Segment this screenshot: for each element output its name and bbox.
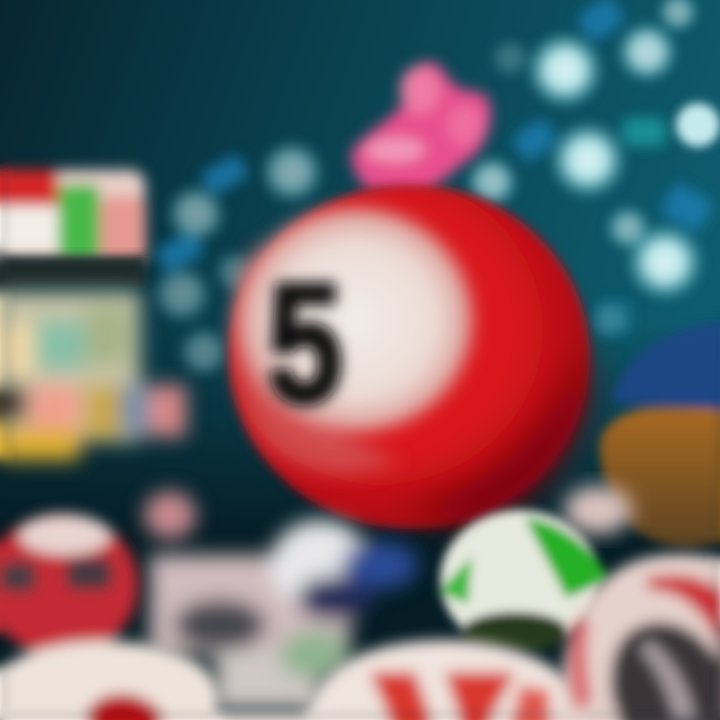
glowing network dots (150, 0, 720, 380)
bottom-centre ball (305, 640, 590, 720)
left shelf: striped ball row (0, 170, 146, 265)
main red bingo ball (227, 185, 590, 529)
centre cluster (144, 491, 418, 710)
bottom-left ball (0, 513, 219, 720)
left shelf: dark band (0, 256, 145, 286)
ball left fringe (233, 240, 400, 473)
pink bow (352, 62, 491, 192)
ball shadow (400, 340, 589, 525)
bottom balls (0, 486, 720, 720)
left shelf: coloured blocks (0, 292, 186, 460)
bottom-right ball (562, 554, 720, 720)
white number patch (227, 198, 483, 442)
blue cap and brown figure (600, 322, 720, 547)
number 5: 5 (267, 249, 343, 438)
green striped ball (438, 510, 608, 652)
